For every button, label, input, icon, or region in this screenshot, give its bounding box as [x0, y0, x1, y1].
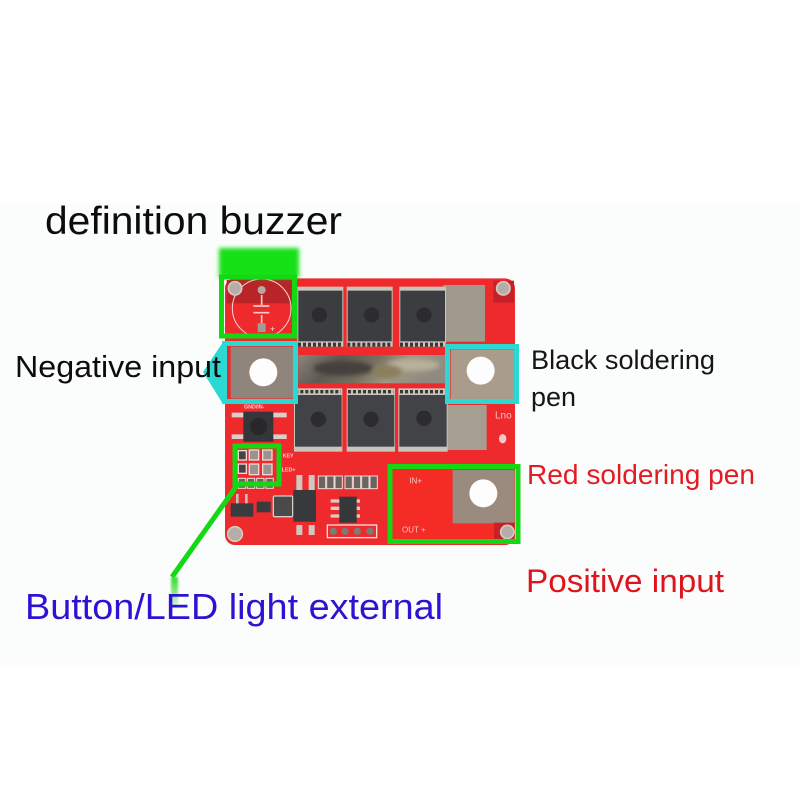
power chip [293, 475, 316, 535]
arrow tail fade [171, 577, 178, 608]
corner mark bottom right [494, 523, 515, 541]
label GND/IN-: GND/IN- [244, 404, 265, 410]
regulator chip left [231, 494, 271, 517]
mosfet top row [297, 287, 446, 347]
label OUT+: OUT + [402, 526, 426, 535]
label: definition buzzer: definition buzzer [45, 200, 342, 243]
solder pad bottom right [447, 405, 487, 450]
header pins [327, 525, 377, 538]
positive pad hole [469, 479, 497, 507]
right copper pad [451, 349, 515, 399]
arrow: cyan pointer to negative input [203, 342, 223, 404]
highlight: negative input frame [224, 344, 296, 402]
label: red soldering pen: Red soldering pen [527, 459, 755, 490]
mosfet bottom row [294, 388, 448, 452]
positive copper pad [453, 470, 515, 523]
buzzer footprint: + [270, 323, 275, 333]
label KEY: KEY [283, 453, 294, 459]
board LED mark [499, 434, 506, 443]
highlight: buzzer top glow [219, 248, 299, 278]
tactile button [232, 412, 287, 442]
board base [225, 278, 515, 545]
left copper pad [231, 347, 294, 398]
controller chip [331, 497, 360, 523]
highlight: buzzer frame [222, 277, 294, 336]
label: negative input: Negative input [15, 349, 221, 384]
resistor row [238, 476, 377, 489]
buzzer footprint [227, 279, 292, 338]
inductor [273, 496, 293, 517]
label IN+: IN+ [409, 477, 422, 486]
left pad hole [249, 358, 277, 386]
corner mark top right [493, 281, 514, 303]
external connector pads [238, 450, 272, 475]
highlight: black pen pad frame [448, 346, 516, 402]
label: black soldering pen [531, 345, 715, 412]
circuit board photo [225, 278, 515, 545]
label: black soldering pen: pen [531, 382, 576, 412]
photo background [0, 203, 800, 665]
arrow: line to button and LED pads [172, 484, 238, 577]
right pad hole [467, 357, 495, 385]
solder pad top right [443, 285, 485, 342]
label: positive input: Positive input [526, 563, 724, 599]
highlight: button and LED connector frame [235, 446, 279, 484]
label: button and LED light external: Button/LED light external [25, 586, 443, 627]
highlight: positive input frame [390, 466, 518, 542]
silver solder strip centre [298, 355, 445, 383]
label LED+: LED+ [282, 468, 295, 474]
label Lno: Lno [495, 410, 512, 421]
label: black soldering pen: Black soldering [531, 345, 715, 375]
positive area [393, 469, 514, 540]
mounting holes [228, 282, 514, 541]
